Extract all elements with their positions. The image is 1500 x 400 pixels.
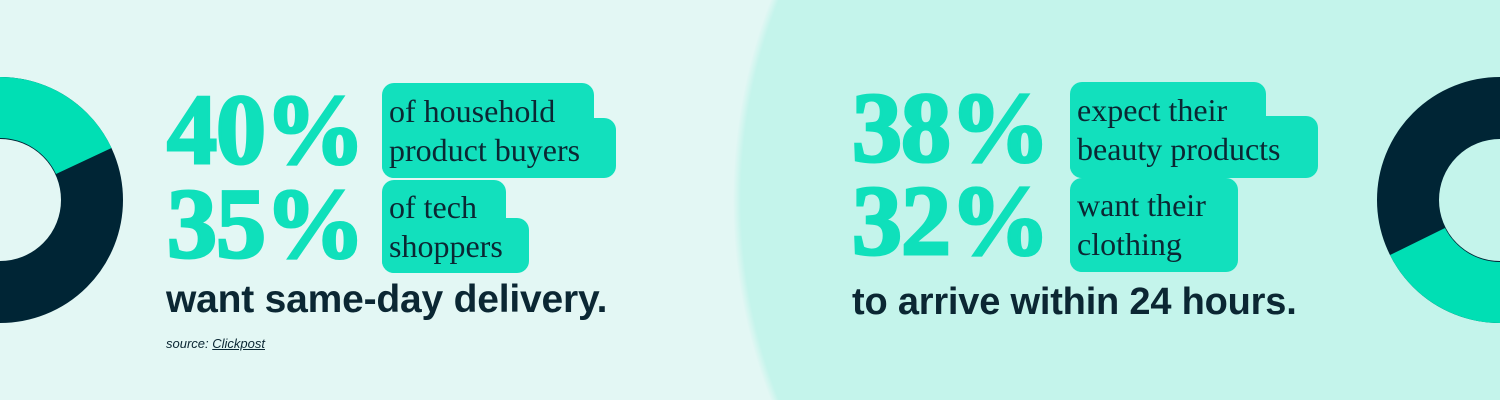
label box: household: of household	[389, 93, 555, 129]
tagline right: to arrive within 24 hours.	[852, 281, 1297, 323]
label box: beauty	[1070, 82, 1318, 178]
label box: tech	[382, 180, 529, 273]
label box: beauty: beauty products	[1077, 131, 1280, 167]
label box: beauty: expect their	[1077, 92, 1227, 128]
stat: 35%: 35%	[167, 168, 364, 279]
label box: clothing: want their	[1077, 187, 1206, 223]
label box: tech: of tech	[389, 189, 477, 225]
donut chart right	[1377, 77, 1500, 323]
label box: clothing	[1070, 178, 1238, 272]
stat: 38%: 38%	[852, 72, 1049, 183]
stat: 40%: 40%	[167, 74, 364, 185]
label box: household: product buyers	[389, 132, 580, 168]
label box: household	[382, 83, 616, 178]
source: source: Clickpost	[166, 336, 265, 351]
tagline left: want same-day delivery.	[166, 278, 607, 321]
stat: 32%: 32%	[852, 165, 1049, 276]
donut chart left	[0, 77, 123, 323]
label box: tech: shoppers	[389, 228, 503, 264]
label box: clothing: clothing	[1077, 226, 1182, 262]
